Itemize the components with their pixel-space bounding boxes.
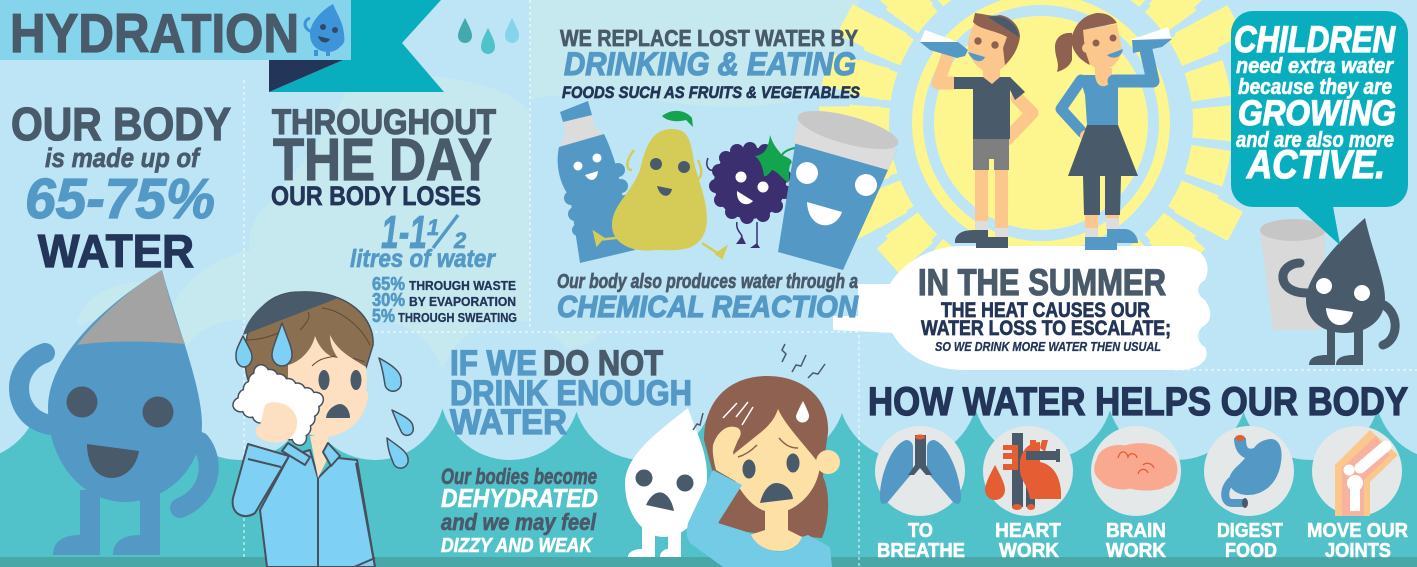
text block: dehydrated: and we may feel bbox=[441, 509, 597, 535]
character: cup bbox=[778, 103, 902, 270]
text block: throughout the day: 65% bbox=[372, 274, 405, 294]
text block: dehydrated: Our bodies become bbox=[441, 464, 597, 489]
text block: in the summer: THE HEAT CAUSES OUR bbox=[941, 299, 1150, 322]
character: half-full water drop bbox=[19, 270, 209, 555]
text block: throughout the day: 1 bbox=[427, 215, 439, 240]
text block: throughout the day: 1-1 bbox=[381, 206, 427, 258]
title: HYDRATION bbox=[10, 2, 299, 64]
icon labels: WORK bbox=[1106, 540, 1167, 562]
character: white drop bbox=[625, 408, 707, 557]
icon: three small drops bbox=[458, 18, 519, 54]
text block: throughout the day: THROUGHOUT bbox=[272, 103, 496, 142]
text block: do not drink enough: DO NOT bbox=[543, 344, 663, 383]
text block: do not drink enough: DRINK ENOUGH bbox=[450, 374, 692, 413]
character: slate drop with cup bbox=[1260, 207, 1395, 365]
icon labels: WORK bbox=[999, 540, 1060, 562]
text block: do not drink enough: IF WE bbox=[450, 344, 537, 383]
text block: throughout the day bbox=[271, 103, 517, 326]
speech bubble: children: GROWING bbox=[1238, 94, 1396, 133]
text block: throughout the day: THE DAY bbox=[273, 127, 492, 193]
icon: brain bbox=[1091, 426, 1181, 516]
text block: dehydrated bbox=[441, 464, 598, 557]
character: pear bbox=[594, 111, 726, 258]
character: water bottle bbox=[558, 101, 635, 263]
text block: dehydrated: DEHYDRATED bbox=[441, 483, 598, 513]
text block: replace lost water bbox=[560, 25, 861, 102]
icon labels bbox=[877, 520, 1409, 562]
text block: throughout the day: litres of water bbox=[350, 245, 496, 273]
text block: in the summer: WATER LOSS TO ESCALATE; bbox=[921, 317, 1171, 340]
icon: stomach bbox=[1204, 426, 1294, 516]
text block: replace lost water: WE REPLACE LOST WATER BY bbox=[560, 25, 858, 51]
text block: in the summer: SO WE DRINK MORE WATER THEN USUAL bbox=[935, 339, 1161, 354]
text block: throughout the day: BY EVAPORATION bbox=[409, 294, 516, 309]
text block: chemical reaction: CHEMICAL REACTION bbox=[557, 289, 859, 324]
icon labels: MOVE OUR bbox=[1307, 520, 1409, 542]
icon: title water drop bbox=[305, 4, 344, 56]
text block: chemical reaction: Our body also produces water through a bbox=[557, 271, 858, 293]
text block: our body bbox=[11, 98, 231, 277]
text block: do not drink enough: WATER bbox=[450, 403, 567, 442]
text block: throughout the day: 2 bbox=[453, 228, 467, 253]
text block: throughout the day: 5% bbox=[372, 306, 395, 326]
text block: our body: is made up of bbox=[45, 143, 202, 173]
text block: in the summer bbox=[918, 262, 1171, 354]
text block: our body: OUR BODY bbox=[11, 98, 231, 150]
icon labels: BREATHE bbox=[877, 540, 965, 562]
text block: throughout the day: THROUGH SWEATING bbox=[398, 310, 517, 325]
icon labels: FOOD bbox=[1225, 540, 1277, 562]
speech bubble: children: need extra water bbox=[1236, 53, 1394, 78]
icon labels: TO bbox=[908, 520, 933, 542]
speech bubble: children: because they are bbox=[1238, 74, 1392, 99]
icon labels: HEART bbox=[995, 520, 1061, 542]
icon: lungs bbox=[875, 426, 965, 516]
text block: our body: WATER bbox=[38, 225, 194, 277]
text block: replace lost water: DRINKING & EATING bbox=[564, 46, 856, 82]
text block: our body: 65-75% bbox=[25, 167, 215, 231]
white bottle banner bbox=[833, 246, 1210, 370]
text block: throughout the day: 30% bbox=[372, 290, 405, 310]
character: dizzy girl bbox=[687, 344, 840, 567]
text block: dehydrated: DIZZY AND WEAK bbox=[441, 535, 593, 557]
speech bubble: children bbox=[1231, 11, 1408, 245]
character: boy drinking bbox=[920, 13, 1032, 248]
sun bbox=[819, 0, 1243, 295]
teal wave ground bbox=[0, 320, 1417, 567]
character: blackberry bbox=[707, 135, 801, 248]
text block: in the summer: IN THE SUMMER bbox=[918, 262, 1166, 303]
icon: heart bbox=[983, 426, 1073, 516]
text block: chemical reaction bbox=[557, 271, 859, 324]
icon: knee joint bbox=[1312, 426, 1402, 516]
text block: replace lost water: FOODS SUCH AS FRUITS & VEGETABLES bbox=[562, 83, 861, 102]
text block: throughout the day: THROUGH WASTE bbox=[409, 278, 516, 293]
text block: throughout the day: OUR BODY LOSES bbox=[271, 181, 481, 211]
ribbon banner bbox=[0, 0, 444, 92]
icon labels: BRAIN bbox=[1106, 520, 1166, 542]
text block: do not drink enough bbox=[450, 344, 692, 442]
character: sweating boy bbox=[233, 292, 413, 567]
character: girl drinking bbox=[1055, 13, 1172, 250]
icon labels: DIGEST bbox=[1217, 520, 1283, 542]
speech bubble: children: ACTIVE. bbox=[1246, 143, 1385, 187]
icon labels: JOINTS bbox=[1325, 540, 1391, 562]
